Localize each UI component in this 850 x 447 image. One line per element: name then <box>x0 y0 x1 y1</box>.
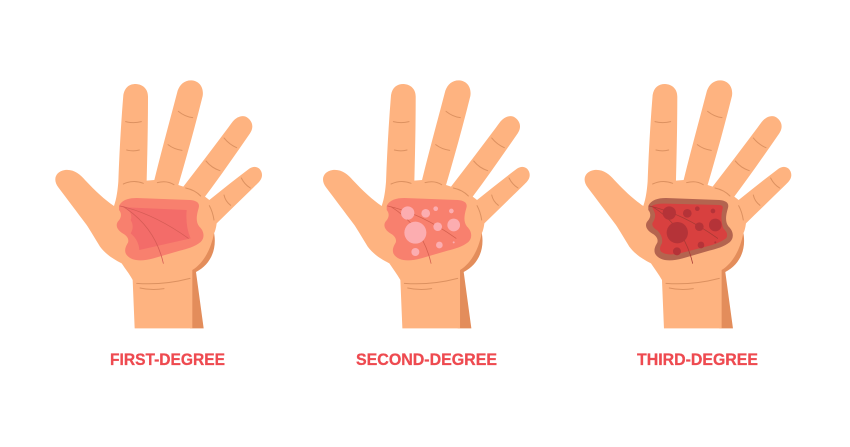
hand: third-degree burn <box>585 80 791 328</box>
burn: outer and inner redness <box>117 198 204 263</box>
label: third-degree: THIRD-DEGREE <box>637 350 758 369</box>
label: first-degree: FIRST-DEGREE <box>110 350 225 369</box>
hand: first-degree burn <box>55 80 262 328</box>
burn: redness with blisters <box>384 198 471 263</box>
burn: charred edge with deep wounds <box>646 198 733 263</box>
hand: second-degree burn <box>323 80 530 328</box>
label: second-degree: SECOND-DEGREE <box>356 350 497 369</box>
